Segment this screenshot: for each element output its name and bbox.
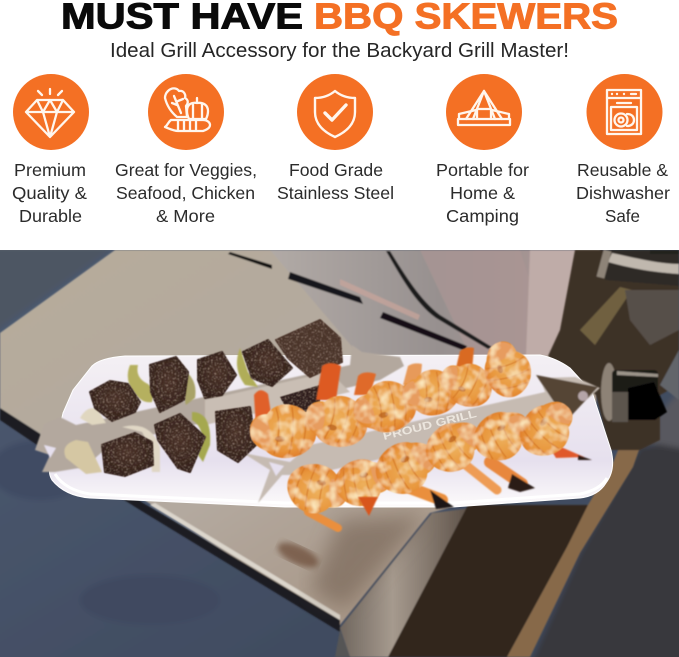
icon: dishwasher bbox=[586, 74, 662, 150]
label: veggies: & More bbox=[156, 206, 215, 226]
grill front panel bbox=[340, 508, 472, 657]
skewer engraving: PROUD GRILL bbox=[382, 408, 478, 443]
label: veggies bbox=[115, 160, 257, 226]
icon: vegetables bbox=[148, 74, 224, 150]
feature: portable bbox=[436, 74, 529, 226]
label: veggies: Seafood, Chicken bbox=[116, 183, 255, 203]
label: veggies: Great for Veggies, bbox=[115, 160, 257, 180]
grill side shelf bbox=[0, 250, 640, 657]
label: premium quality bbox=[12, 160, 87, 226]
feature: food grade steel bbox=[277, 74, 394, 203]
label: food grade steel bbox=[277, 160, 394, 203]
shrimp row: front bbox=[286, 401, 574, 514]
icon: tent bbox=[446, 74, 522, 150]
label: portable: Camping bbox=[446, 206, 519, 226]
subtitle: Ideal Grill Accessory for the Backyard Grill Master! bbox=[110, 39, 569, 62]
label: food grade steel: Food Grade bbox=[289, 160, 383, 180]
stain on shelf bbox=[275, 540, 320, 570]
label: portable: Home & bbox=[450, 183, 515, 203]
shrimp tails: front row bbox=[308, 440, 592, 528]
icon: diamond bbox=[13, 74, 89, 150]
beef chunks bbox=[90, 320, 342, 476]
shelf shading bbox=[310, 515, 425, 610]
label: premium quality: Durable bbox=[19, 206, 82, 226]
shrimp tails: back row bbox=[253, 346, 475, 419]
front skewer bbox=[243, 375, 600, 503]
white tray bbox=[50, 355, 613, 507]
title bbox=[61, 0, 618, 36]
label: food grade steel: Stainless Steel bbox=[277, 183, 394, 203]
label: portable bbox=[436, 160, 529, 226]
feature: veggies bbox=[115, 74, 257, 226]
icon: shield bbox=[297, 74, 373, 150]
feature: dishwasher bbox=[576, 74, 670, 226]
floor bbox=[0, 245, 679, 657]
label: dishwasher bbox=[576, 160, 670, 226]
label: dishwasher: Dishwasher bbox=[576, 183, 670, 203]
label: dishwasher: Safe bbox=[605, 206, 640, 226]
photo: skewers on a grill side shelf bbox=[0, 245, 679, 657]
label: premium quality: Quality & bbox=[12, 183, 87, 203]
label: portable: Portable for bbox=[436, 160, 529, 180]
label: dishwasher: Reusable & bbox=[577, 160, 668, 180]
label: premium quality: Premium bbox=[14, 160, 86, 180]
vegetables bbox=[64, 348, 258, 474]
shrimp tail tip bbox=[358, 497, 378, 516]
feature: premium quality bbox=[12, 74, 89, 226]
back skewer bbox=[35, 345, 404, 472]
shrimp row: back bbox=[250, 335, 538, 458]
grill body and knob bbox=[548, 249, 679, 450]
